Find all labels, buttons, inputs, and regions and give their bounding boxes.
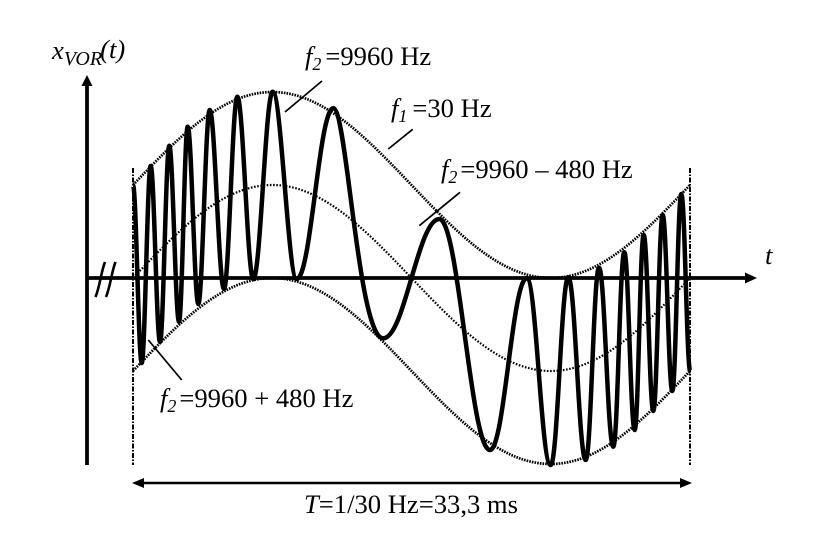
y axis label: (t)	[100, 34, 125, 64]
label: 30 Hz: =30 Hz	[412, 93, 492, 123]
lower envelope curve	[133, 278, 690, 464]
upper envelope curve	[133, 92, 690, 278]
axis break marks	[96, 262, 116, 297]
period boundary lines	[133, 168, 690, 465]
frequency modulated signal	[133, 92, 690, 465]
middle 30 Hz curve	[133, 185, 690, 371]
label: upper frequency: 2	[167, 396, 176, 416]
label: carrier frequency: f	[305, 41, 316, 71]
horizontal time axis arrow	[87, 272, 757, 284]
label: lower frequency: =9960 – 480 Hz	[460, 154, 633, 184]
label: upper frequency: =9960 + 480 Hz	[179, 383, 354, 413]
leader lines	[148, 81, 460, 380]
label: upper frequency: f	[160, 383, 171, 413]
y axis label: x	[51, 35, 64, 65]
y axis label: VOR	[64, 48, 102, 70]
label: lower frequency: f	[441, 154, 452, 184]
label: 30 Hz: 1	[398, 106, 407, 126]
label: 30 Hz: f	[391, 93, 402, 123]
label: lower frequency: 2	[448, 167, 457, 187]
label: carrier frequency: 2	[312, 54, 321, 74]
period label: T=1/30 Hz=33,3 ms	[304, 489, 518, 519]
time axis label: t	[765, 240, 773, 270]
label: carrier frequency: =9960 Hz	[325, 41, 431, 71]
period span arrow	[132, 478, 692, 488]
vertical axis arrow	[82, 75, 92, 465]
